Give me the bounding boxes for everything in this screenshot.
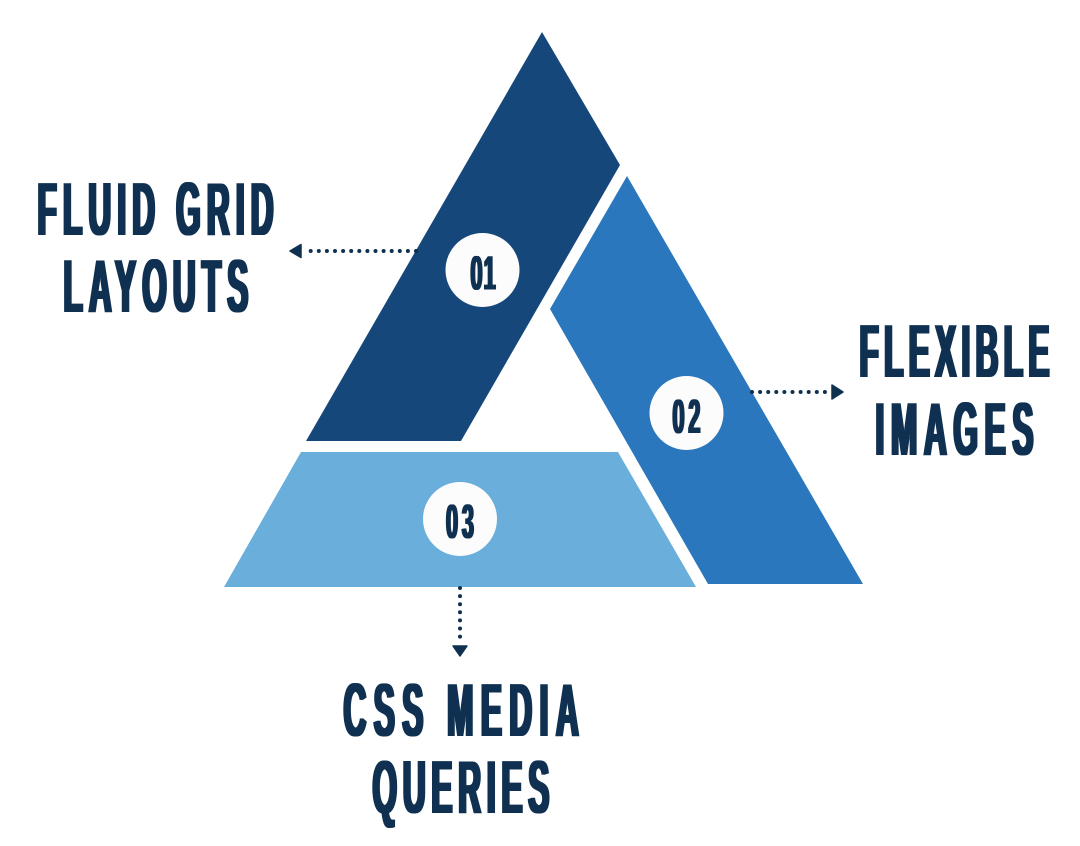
heading: CSS Media Queries: CSS MEDIA bbox=[344, 670, 579, 753]
heading: Fluid Grid Layouts: FLUID GRID bbox=[38, 169, 274, 252]
heading: Flexible Images: FLEXIBLE bbox=[860, 311, 1049, 394]
badge: 01 bbox=[446, 233, 520, 307]
arrow: 03 to CSS Media Queries bbox=[453, 588, 467, 656]
heading: Fluid Grid Layouts bbox=[38, 169, 274, 329]
badge: 01: 01 bbox=[470, 246, 496, 300]
badge: 02 bbox=[650, 376, 724, 450]
arrow: 02 to Flexible Images bbox=[752, 385, 843, 399]
heading: CSS Media Queries bbox=[344, 670, 579, 830]
panel: segment 01 dark blue bbox=[306, 32, 620, 441]
badge: 02: 02 bbox=[672, 389, 700, 443]
badge: 03 bbox=[423, 482, 497, 556]
panel: segment 02 mid blue bbox=[550, 176, 863, 584]
heading: Flexible Images bbox=[860, 311, 1049, 472]
heading: Flexible Images: IMAGES bbox=[876, 389, 1033, 472]
badge: 03: 03 bbox=[446, 494, 474, 548]
heading: CSS Media Queries: QUERIES bbox=[372, 747, 549, 830]
panel: segment 03 light blue bbox=[224, 452, 696, 587]
arrow: 01 to Fluid Grid Layouts bbox=[290, 244, 416, 258]
heading: Fluid Grid Layouts: LAYOUTS bbox=[64, 246, 248, 329]
